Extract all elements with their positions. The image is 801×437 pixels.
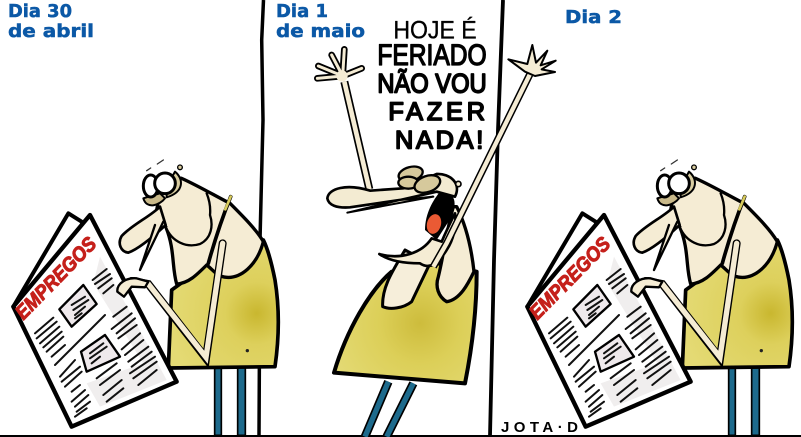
lower jaw xyxy=(379,213,455,266)
torso and head skin xyxy=(157,177,263,284)
signature: JOTA·D xyxy=(501,419,578,436)
glasses and eye xyxy=(143,160,182,205)
torso and head skin xyxy=(671,177,777,284)
ear xyxy=(456,181,461,187)
newspaper headline: EMPREGOS xyxy=(11,233,102,324)
glasses and eye xyxy=(657,160,696,205)
upper head and snout xyxy=(327,174,457,208)
arm xyxy=(132,243,223,358)
neck and chest skin xyxy=(383,250,430,308)
shoulder strap xyxy=(722,197,745,263)
heading: Dia 2: Dia 2 xyxy=(565,7,622,28)
closed eyes xyxy=(397,164,443,196)
legs xyxy=(215,367,245,435)
nose xyxy=(634,207,680,253)
jaw xyxy=(654,193,726,270)
heading: Dia 30 de abril: Dia 30 xyxy=(8,1,72,22)
speech: hoje e feriado nao vou fazer nada: NÃO VOU xyxy=(377,69,487,99)
shirt xyxy=(334,263,477,383)
figure: celebrating person, day 1 xyxy=(317,15,556,437)
newspaper headline: EMPREGOS xyxy=(525,233,616,324)
tongue xyxy=(425,213,443,235)
hand xyxy=(631,278,662,297)
left hand xyxy=(317,49,362,82)
bottom border xyxy=(0,435,801,437)
jaw xyxy=(140,193,212,270)
legs xyxy=(729,367,759,435)
right hand xyxy=(508,45,556,76)
shirt spot xyxy=(246,349,249,352)
newspaper xyxy=(525,213,691,427)
shirt spot xyxy=(760,349,763,352)
shirt xyxy=(168,240,278,368)
speech: hoje e feriado nao vou fazer nada: FERIADO xyxy=(377,39,487,72)
arm xyxy=(646,243,737,358)
lower lip line xyxy=(347,197,433,213)
open mouth xyxy=(425,192,455,240)
heading: Dia 30 de abril: de abril xyxy=(8,21,94,42)
hand xyxy=(117,278,148,297)
legs xyxy=(365,382,413,437)
divider: left panel border xyxy=(259,0,264,436)
left arm xyxy=(344,82,369,189)
speech: hoje e feriado nao vou fazer nada: HOJE É xyxy=(393,15,477,44)
shoulder strap xyxy=(208,197,231,263)
divider: right panel border xyxy=(490,0,503,436)
legs colour xyxy=(365,382,413,437)
nose xyxy=(120,207,166,253)
speech: hoje e feriado nao vou fazer nada: FAZER xyxy=(388,98,485,126)
heading: Dia 1 de maio: Dia 1 xyxy=(276,1,328,22)
newspaper xyxy=(11,213,177,427)
speech: hoje e feriado nao vou fazer nada xyxy=(377,15,487,155)
heading: Dia 1 de maio: de maio xyxy=(276,21,365,42)
figure: reader with newspaper, day 30 xyxy=(11,160,278,435)
shirt xyxy=(682,240,792,368)
figure: reader with newspaper, day 2 xyxy=(525,160,792,435)
right arm xyxy=(433,73,531,267)
speech: hoje e feriado nao vou fazer nada: NADA! xyxy=(395,127,483,155)
